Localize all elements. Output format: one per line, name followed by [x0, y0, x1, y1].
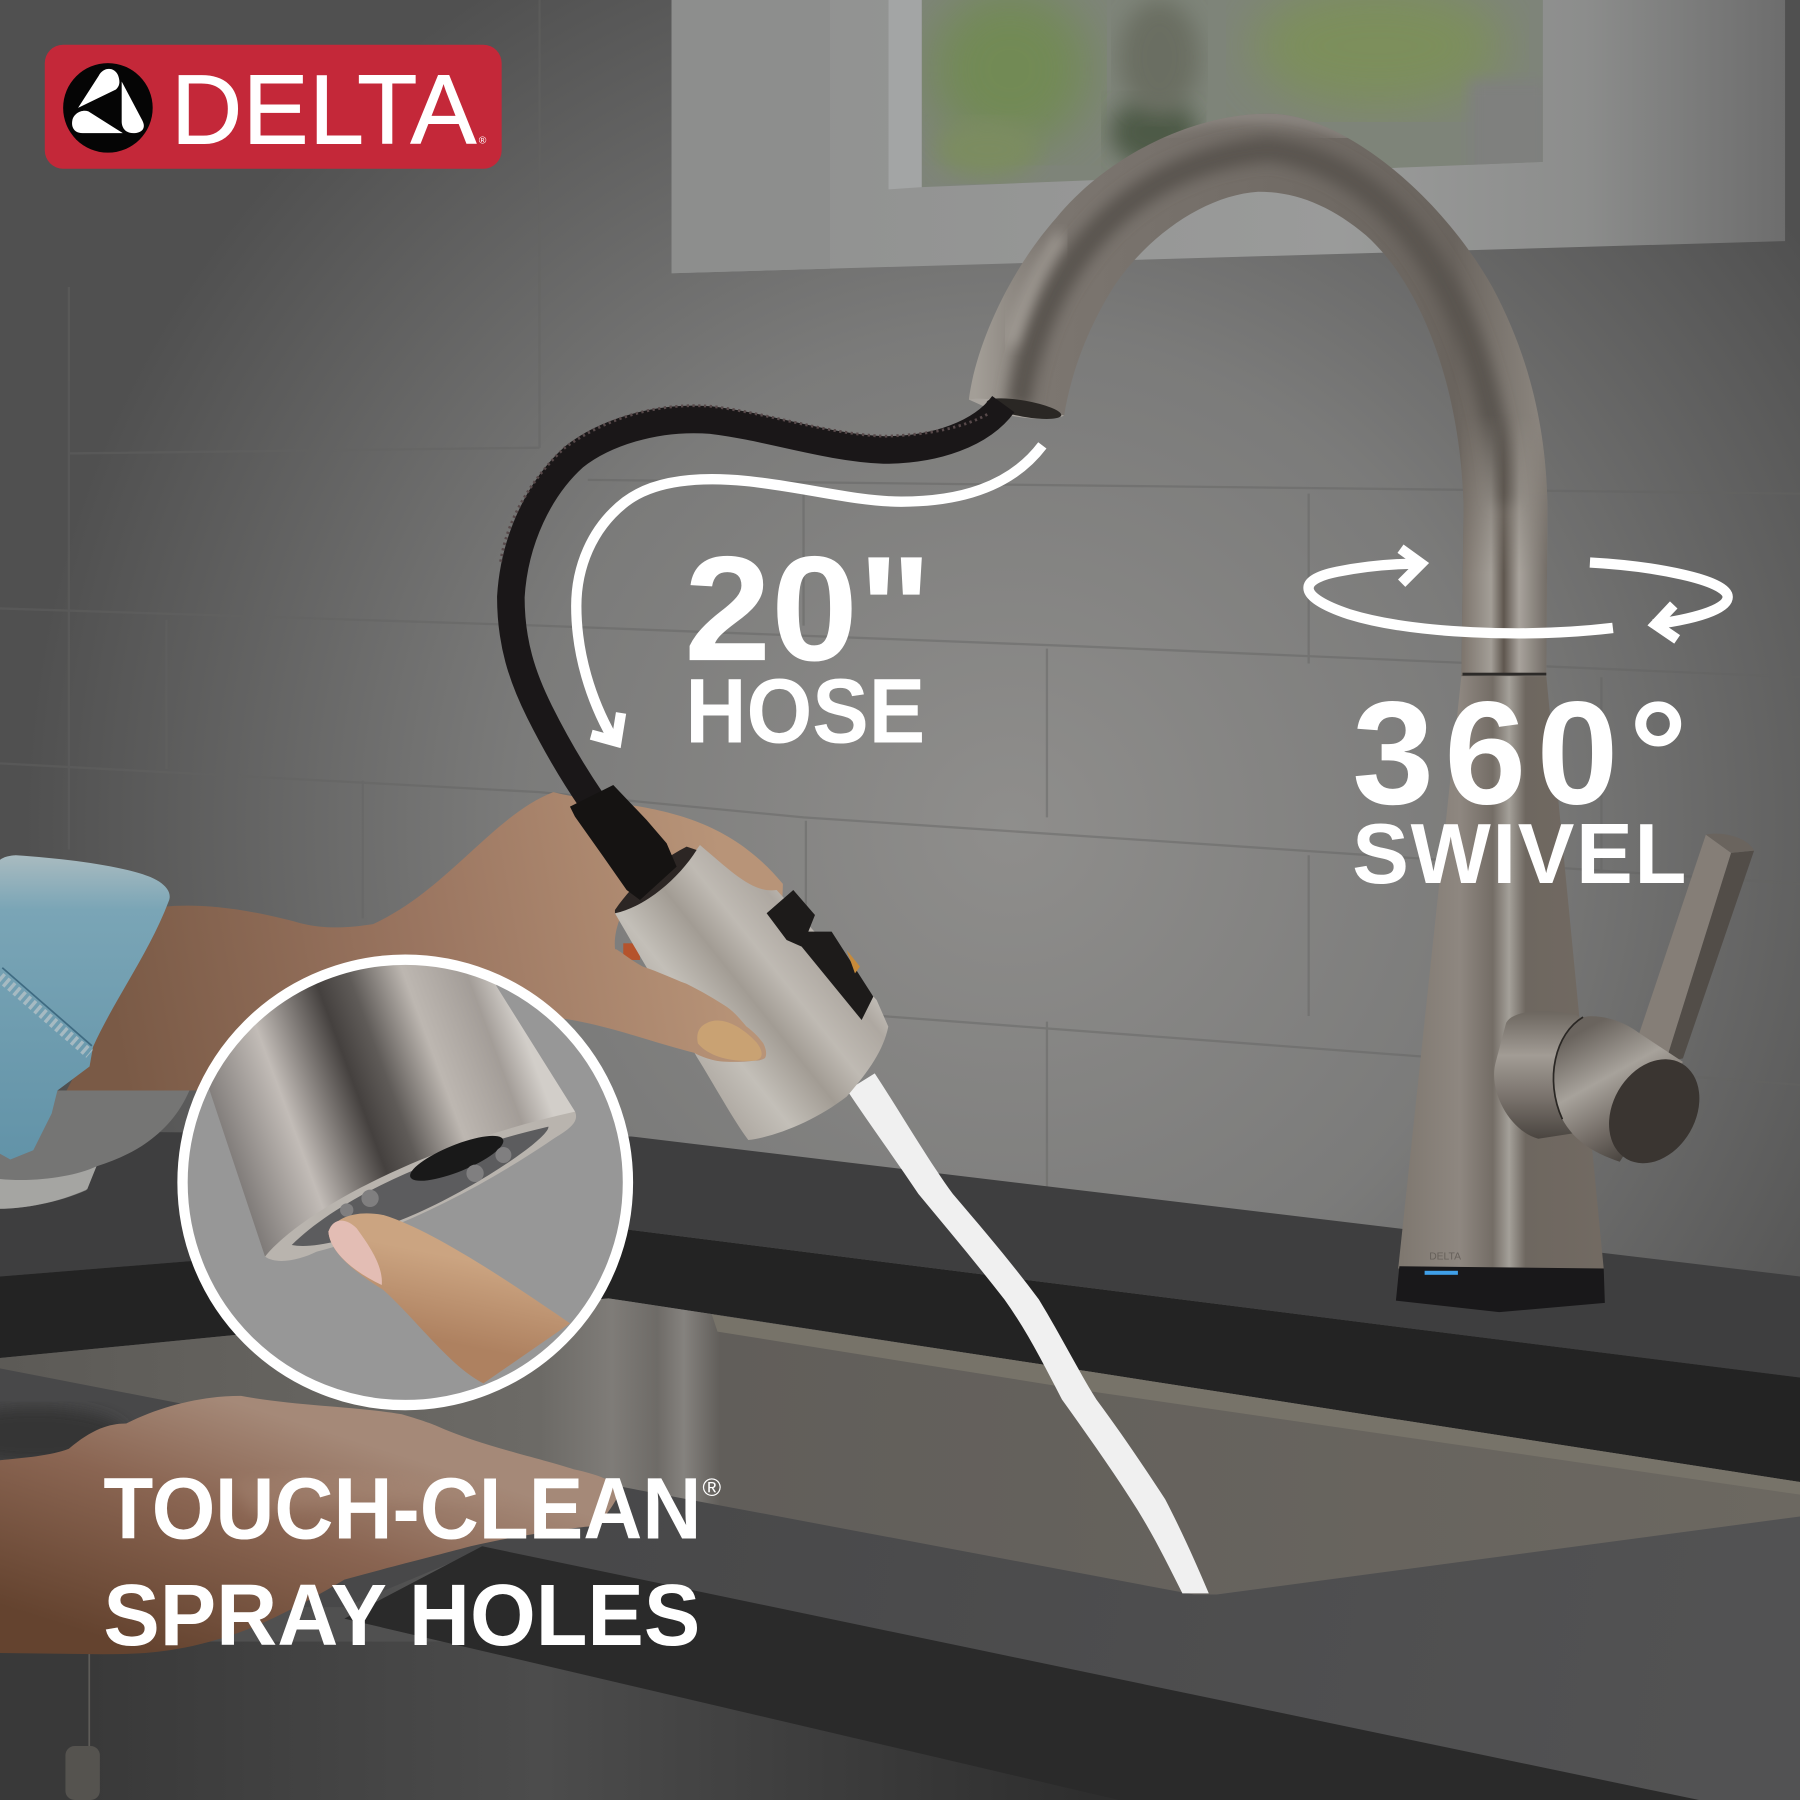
spray head — [570, 785, 888, 1140]
arrows: 360 swivel — [1309, 549, 1728, 639]
Delta logo — [45, 45, 502, 169]
faucet spout — [969, 114, 1547, 677]
sleeve — [0, 855, 170, 1159]
text: 360 swivel: SWIVEL — [1352, 806, 1686, 901]
logo emblem — [63, 63, 153, 153]
hose connector — [570, 785, 677, 900]
text: 20 inch hose — [684, 525, 932, 763]
spray body — [615, 845, 888, 1140]
spray opening — [410, 1136, 504, 1181]
water stream — [847, 1073, 1209, 1593]
handle hub — [1494, 1011, 1601, 1139]
faucet base body — [1398, 676, 1604, 1268]
spray nozzles — [340, 1147, 511, 1217]
text: touch-clean spray holes: SPRAY HOLES — [103, 1567, 700, 1664]
nozzle rim — [265, 1112, 576, 1261]
thumb over spray head — [517, 936, 766, 1062]
lower hand — [0, 1396, 621, 1654]
touch indicator light — [1425, 1271, 1458, 1275]
text: touch-clean spray holes: TOUCH-CLEAN — [103, 1460, 701, 1557]
spray opening — [615, 847, 697, 913]
nozzle face with spray holes — [292, 1127, 548, 1246]
text: 20 inch hose: HOSE — [685, 661, 925, 763]
window — [672, 0, 1785, 273]
orange reflection — [623, 943, 640, 960]
nozzle cylinder — [209, 964, 575, 1256]
back countertop — [0, 1131, 1800, 1482]
handle lever — [1639, 834, 1754, 1062]
sink basin — [0, 1298, 1800, 1596]
sink drawer knob — [65, 1653, 100, 1800]
thumbnail — [697, 1021, 762, 1061]
text: touch-clean spray holes: ® — [703, 1474, 722, 1502]
logo wordmark: DELTA — [171, 54, 477, 164]
inset circle: touch-clean spray holes — [181, 953, 629, 1406]
arrow: hose length — [576, 445, 1042, 742]
base logo: DELTA — [1429, 1251, 1461, 1262]
text: 20 inch hose: 20" — [684, 525, 932, 692]
spray buttons — [767, 890, 873, 1020]
fingernail — [328, 1221, 382, 1285]
handle end cap — [1591, 1043, 1718, 1180]
fingertip — [328, 1213, 570, 1383]
upper arm and hand — [67, 792, 783, 1091]
spout mouth — [969, 394, 1064, 423]
Delta logo: ® — [479, 135, 487, 146]
text: 360 swivel: 360° — [1352, 672, 1688, 836]
faucet — [969, 114, 1754, 1312]
text: touch-clean spray holes — [103, 1460, 722, 1664]
black base — [1396, 1266, 1605, 1312]
finger highlight — [230, 1474, 528, 1515]
orange button accent — [847, 950, 860, 973]
handle cylinder — [1553, 1016, 1683, 1162]
hose — [501, 404, 1003, 800]
front countertop — [0, 1368, 1800, 1800]
bowl at left — [0, 1091, 189, 1209]
faucet collar line — [1462, 673, 1546, 676]
